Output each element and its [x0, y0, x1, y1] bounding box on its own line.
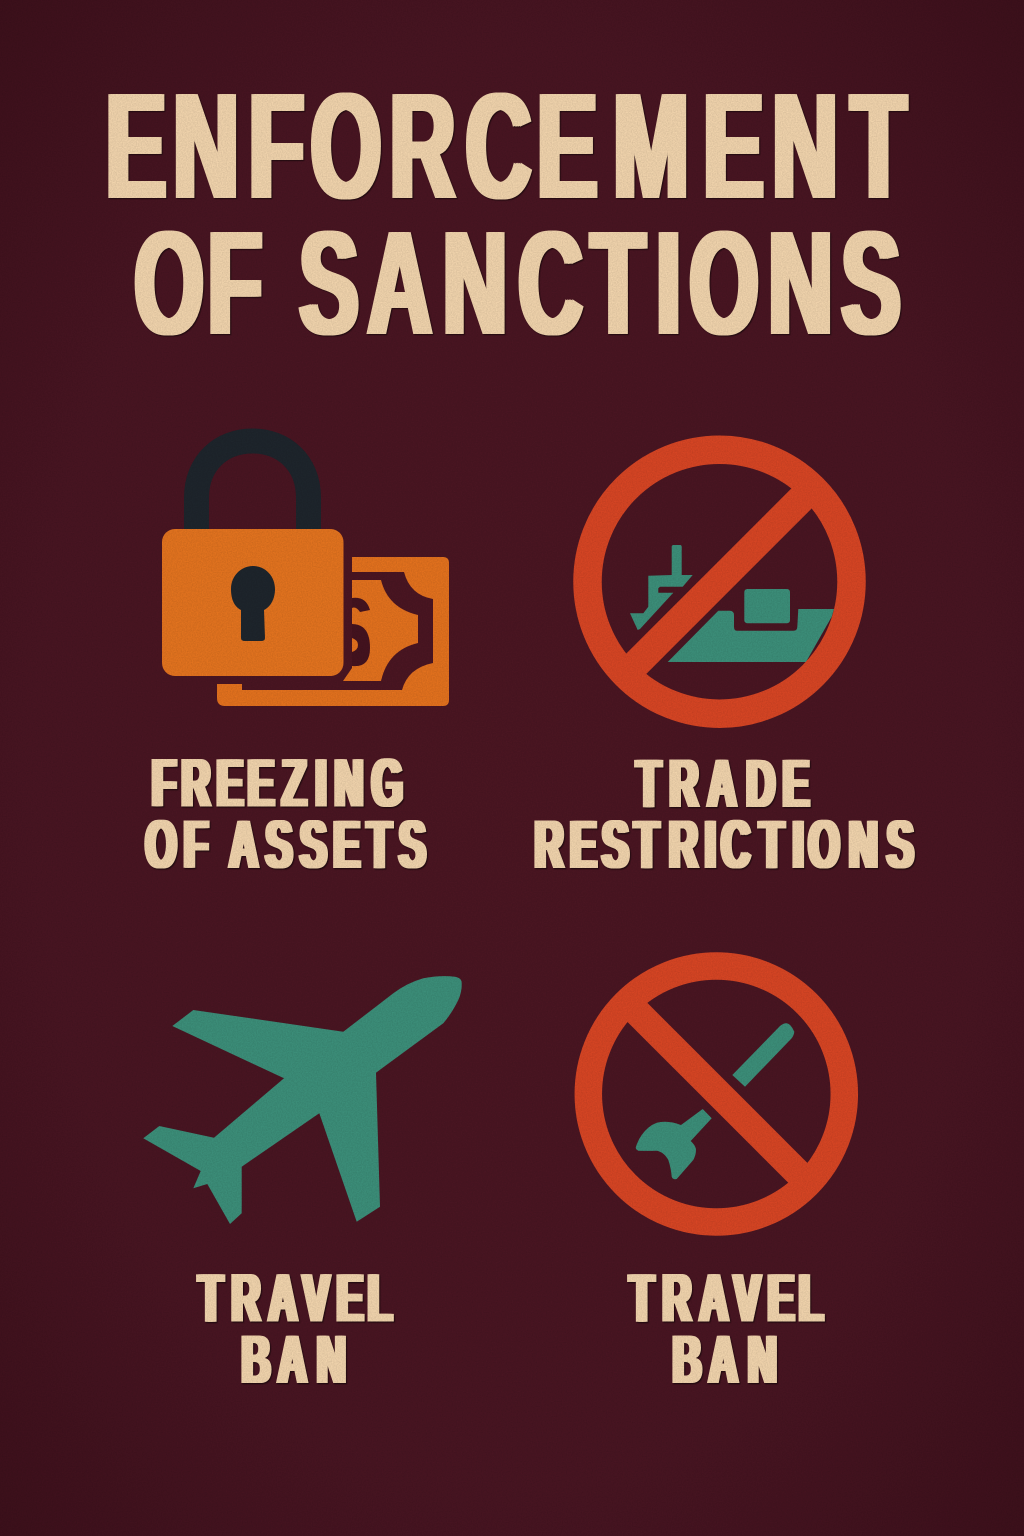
label: travel ban left: BAN — [242, 1321, 346, 1398]
icon part: ship container — [744, 589, 790, 623]
label: freezing of assets: OF ASSETS — [146, 806, 426, 883]
title: ENFORCEMENT — [106, 62, 906, 231]
icon part: tool handle — [732, 1023, 794, 1087]
title: OF SANCTIONS — [134, 201, 901, 366]
label: travel ban right — [630, 1259, 823, 1398]
label: freezing of assets — [146, 744, 426, 883]
icon: padlock with banknote — [162, 441, 449, 706]
label: trade restrictions: TRADE — [637, 745, 809, 822]
icon part: keyhole — [231, 566, 275, 641]
icon part: prohibition sign — [588, 966, 844, 1222]
icon part: tool head — [636, 1109, 712, 1179]
label: trade restrictions: RESTRICTIONS — [535, 806, 913, 883]
label: trade restrictions — [535, 745, 913, 883]
icon part: ship bow and mast — [630, 545, 693, 630]
icon part: prohibition sign — [588, 450, 852, 714]
icon part: lock body — [162, 529, 344, 676]
icon part: shackle — [196, 441, 308, 530]
label: travel ban left — [199, 1259, 392, 1398]
icon part: banknote — [217, 557, 449, 706]
label: freezing of assets: FREEZING — [152, 744, 403, 821]
icon part: ship hull — [668, 609, 834, 662]
icon: prohibited cargo ship — [588, 450, 852, 714]
icon: prohibited broken handle tool — [588, 966, 844, 1222]
label: travel ban right: BAN — [673, 1321, 777, 1398]
title — [106, 62, 906, 366]
label: travel ban left: TRAVEL — [199, 1259, 392, 1336]
label: travel ban right: TRAVEL — [630, 1259, 823, 1336]
icon: airplane — [143, 976, 462, 1224]
